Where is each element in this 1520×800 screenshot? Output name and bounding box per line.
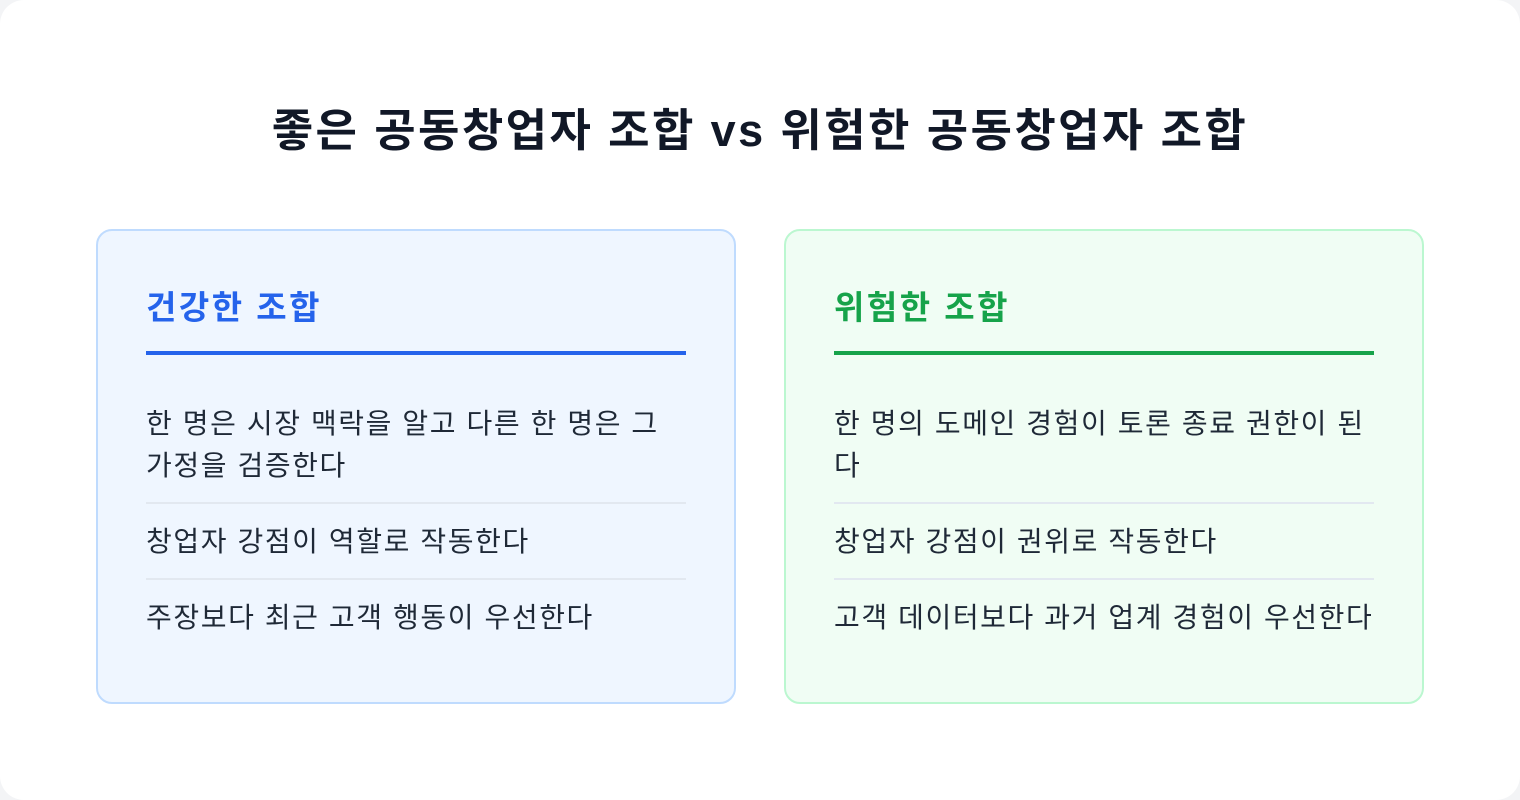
list: healthy items: 한 명은 시장 맥락을 알고 다른 한 명은 그	[146, 408, 659, 439]
panel: healthy combination	[96, 229, 736, 704]
list: risky items: 고객 데이터보다 과거 업계 경험이 우선한다	[834, 602, 1373, 633]
heading underline	[834, 351, 1374, 355]
list: risky items: 한 명의 도메인 경험이 토론 종료 권한이 된	[834, 408, 1365, 439]
heading: healthy: 건강한 조합	[146, 289, 322, 326]
list: healthy items	[146, 408, 686, 633]
list: risky items: 다	[834, 450, 861, 481]
panel: risky combination	[784, 229, 1424, 704]
list: healthy items: 창업자 강점이 역할로 작동한다	[146, 526, 530, 557]
title: 좋은 공동창업자 조합 vs 위험한 공동창업자 조합	[272, 105, 1248, 156]
list: healthy items: 주장보다 최근 고객 행동이 우선한다	[146, 602, 594, 633]
heading: risky: 위험한 조합	[834, 289, 1010, 326]
list: risky items: 창업자 강점이 권위로 작동한다	[834, 526, 1218, 557]
list: risky items	[834, 408, 1374, 633]
heading underline	[146, 351, 686, 355]
list: healthy items: 가정을 검증한다	[146, 450, 347, 481]
